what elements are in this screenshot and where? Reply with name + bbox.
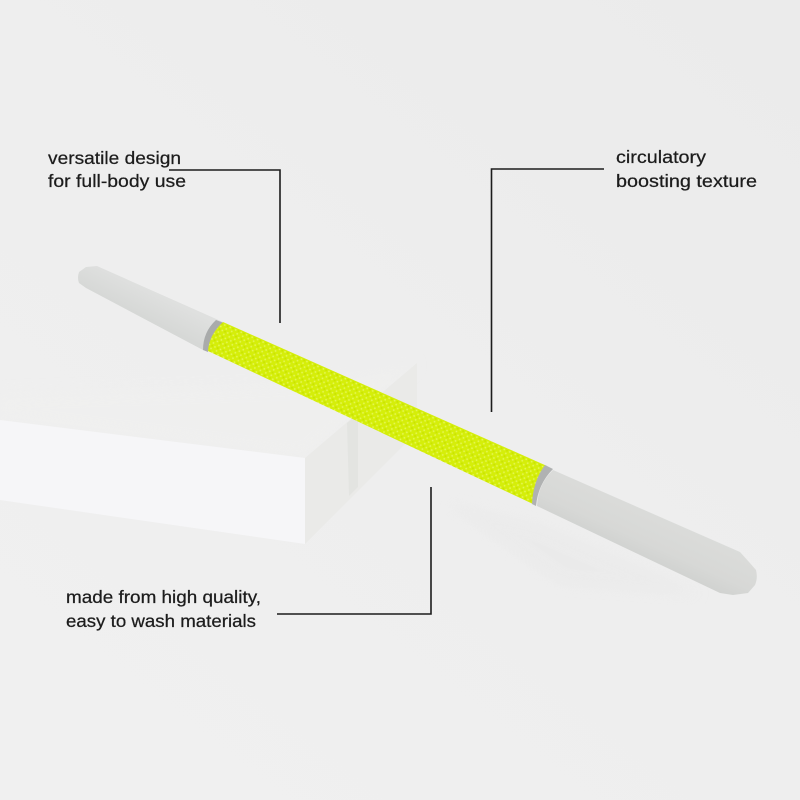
- soft floor shadow: [440, 500, 700, 595]
- callout: versatile design: [48, 148, 280, 323]
- block front face: [0, 420, 305, 544]
- callout: circulatory texture: boosting texture: [616, 171, 757, 191]
- right metal ring: [532, 465, 553, 506]
- block shaded band: [347, 414, 358, 496]
- left handle: [78, 266, 223, 350]
- callout: circulatory texture: [492, 147, 757, 412]
- left metal ring: [203, 320, 224, 352]
- callout text: versatile design: [48, 148, 181, 168]
- leader line: [169, 170, 280, 323]
- callout text: circulatory: [616, 147, 706, 167]
- textured green grip: [208, 322, 547, 504]
- white block: [0, 363, 417, 544]
- callout: materials: easy to wash materials: [66, 611, 256, 631]
- leader line: [492, 169, 604, 412]
- block right face: [305, 363, 417, 544]
- callout: materials: [66, 487, 431, 631]
- right handle: [537, 470, 757, 595]
- callout: versatile design: for full-body use: [48, 171, 186, 191]
- block top face: [0, 363, 417, 458]
- callout text: made from high quality,: [66, 587, 261, 607]
- leader line: [277, 487, 431, 614]
- massage stick: [78, 266, 757, 595]
